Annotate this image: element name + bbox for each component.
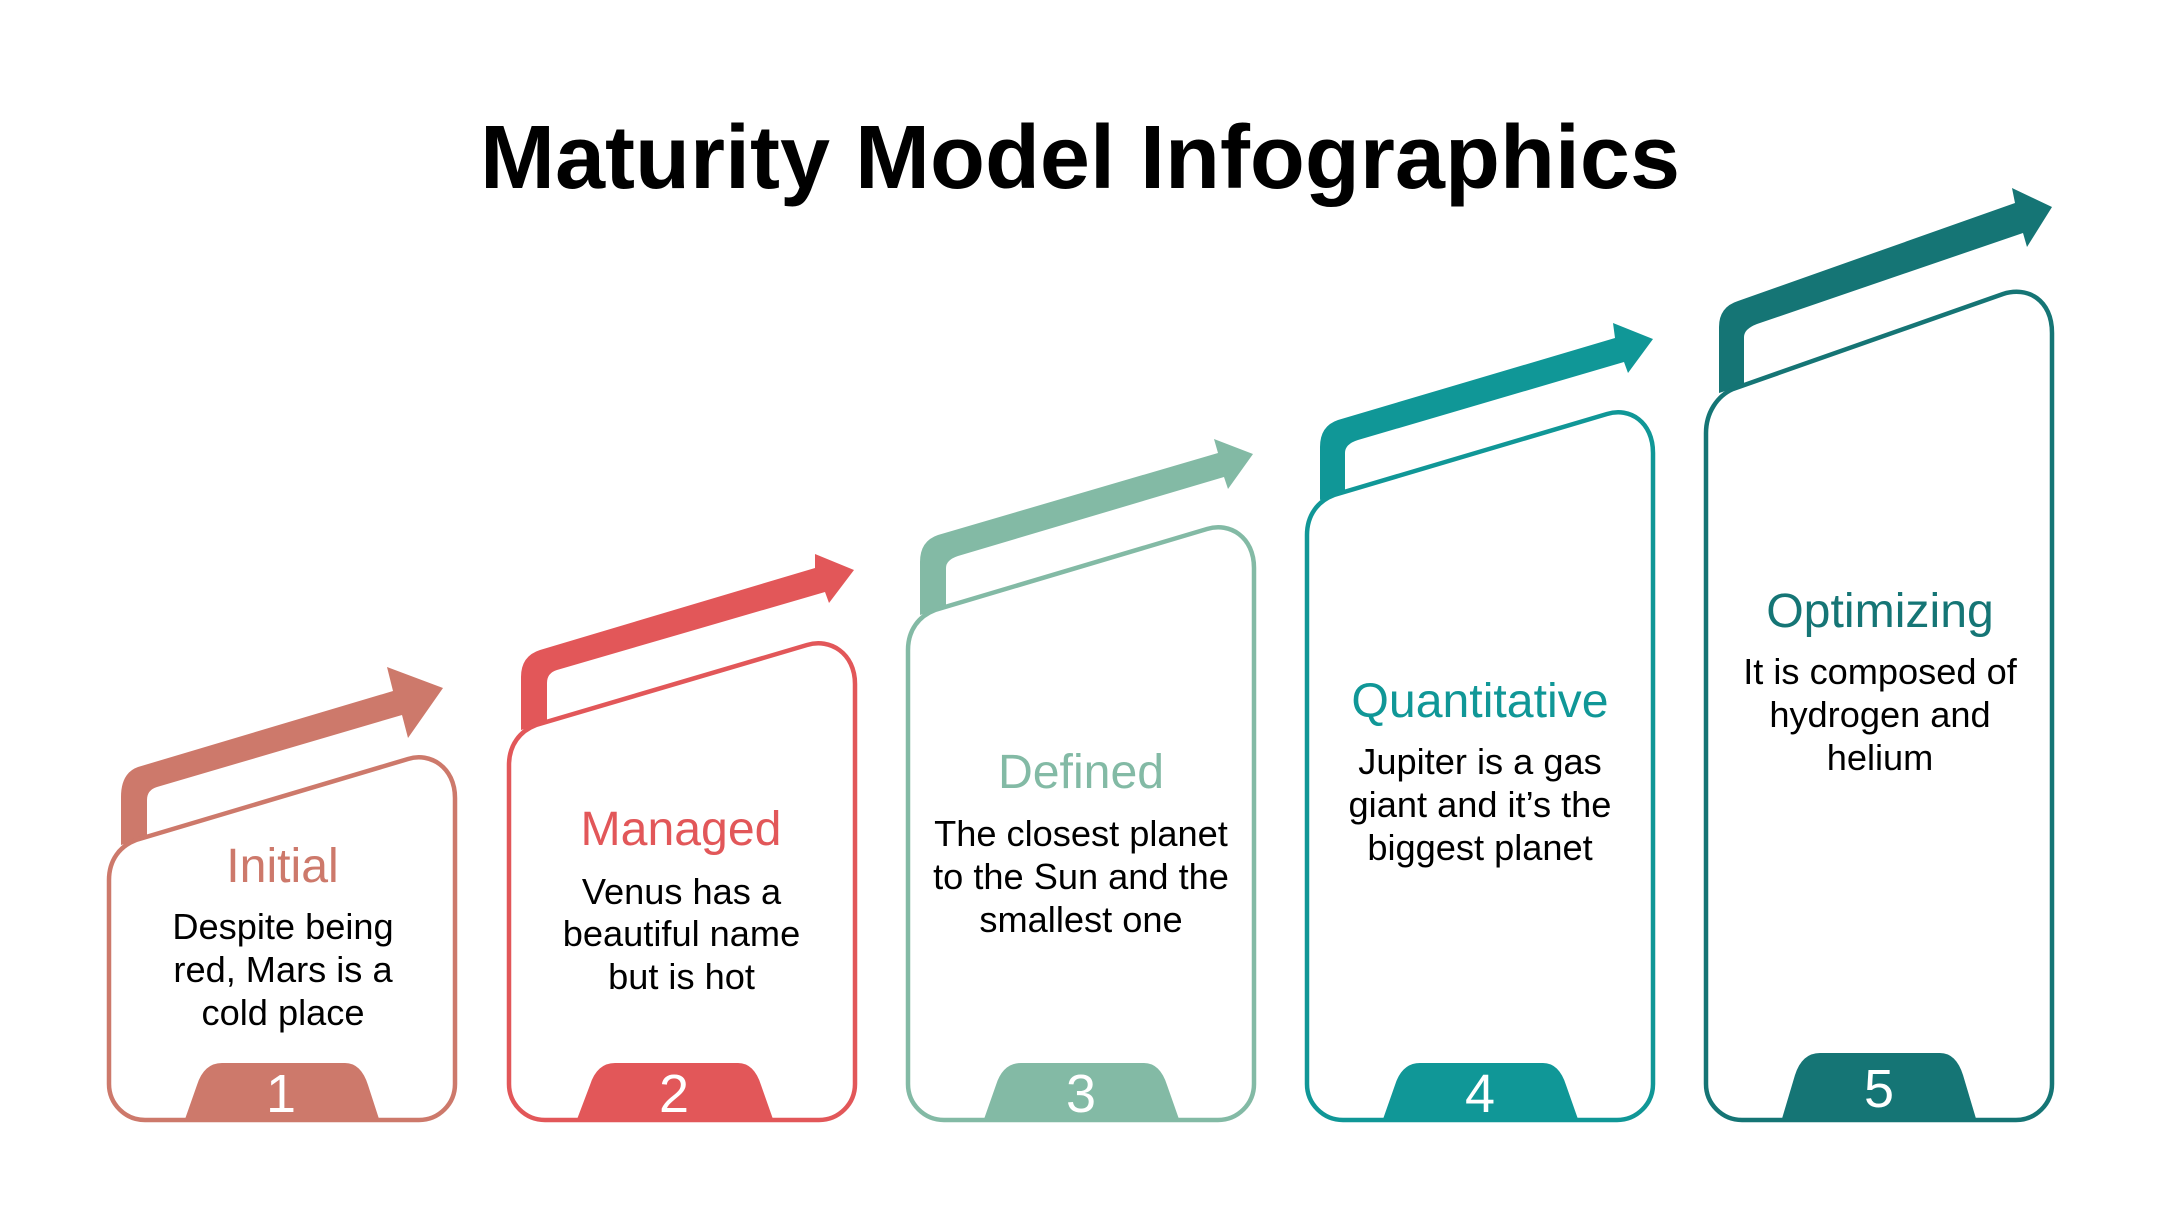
arrow: step 4 [1320,323,1653,500]
title: Maturity Model Infographics [480,108,1680,208]
panel: step 2 Managed [509,554,855,1124]
description: step 3: smallest one [979,899,1183,940]
description: step 3: to the Sun and the [933,856,1229,897]
heading: Defined: Defined [998,745,1164,799]
number: 2: 2 [659,1064,689,1124]
description: step 4: biggest planet [1367,827,1593,868]
number tab: step 4 [1382,1063,1579,1122]
number tab: step 3 [983,1063,1180,1122]
heading: Managed: Managed [581,802,781,856]
description: step 2: but is hot [608,956,755,997]
number tab: step 5 [1781,1053,1977,1122]
description: step 4: giant and it’s the [1349,784,1611,825]
arrow: step 1 [121,667,443,845]
number: 4: 4 [1465,1064,1495,1124]
description: step 1: Despite being [172,906,394,947]
heading: Initial: Initial [226,839,339,893]
card outline: step 4 [1307,412,1653,1120]
number tab: step 2 [576,1063,774,1122]
description: step 1: red, Mars is a [173,949,393,990]
arrow: step 3 [920,439,1253,615]
description: step 5: hydrogen and [1769,694,1991,735]
description: step 3: The closest planet [934,813,1228,854]
description: step 2: Venus has a [582,871,782,912]
description: step 4: Jupiter is a gas [1358,741,1602,782]
heading: Quantitative: Quantitative [1351,674,1609,728]
arrow: step 2 [521,554,854,730]
description: step 5: helium [1827,737,1933,778]
panel: step 3 Defined [908,439,1254,1124]
number tab: step 1 [184,1063,380,1122]
number: 5: 5 [1864,1059,1894,1119]
card outline: step 1 [109,757,455,1120]
description: step 5: It is composed of [1743,651,2018,692]
description: step 2: beautiful name [563,913,800,954]
panel: step 4 Quantitative [1307,323,1653,1124]
panel: step 5 Optimizing [1706,188,2052,1122]
card outline: step 5 [1706,292,2052,1120]
arrow: step 5 [1719,188,2052,393]
heading: Optimizing: Optimizing [1766,584,1994,638]
card outline: step 3 [908,527,1254,1120]
number: 1: 1 [266,1064,296,1124]
description: step 1: cold place [202,992,364,1033]
card outline: step 2 [509,643,855,1120]
panel: step 1 Initial [109,667,455,1124]
number: 3: 3 [1066,1064,1096,1124]
